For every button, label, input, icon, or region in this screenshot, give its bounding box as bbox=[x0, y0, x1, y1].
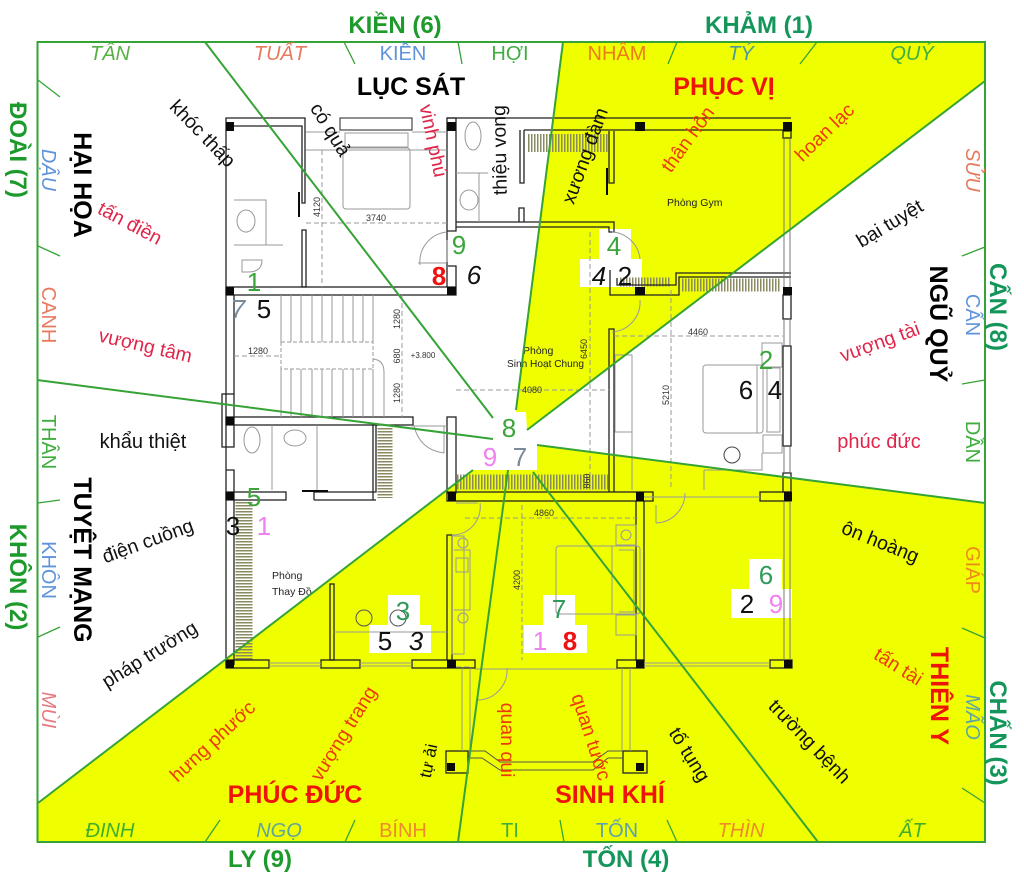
black inauspicious direction labels: trường bệnh bbox=[764, 695, 855, 788]
outer trigram labels: KHẢM (1) bbox=[705, 10, 813, 39]
mountain labels: TÂN bbox=[90, 42, 131, 65]
sector SE stars bbox=[533, 594, 577, 656]
mountain labels: BÍNH bbox=[379, 819, 427, 842]
mountain labels: SỬU bbox=[961, 148, 985, 192]
red auspicious direction labels on white bbox=[94, 102, 923, 453]
sector SW stars bbox=[226, 482, 271, 541]
mountain labels: NGỌ bbox=[256, 820, 302, 842]
black inauspicious direction labels: khóc thấp bbox=[165, 96, 240, 172]
wardrobes bbox=[244, 143, 780, 660]
dimension labels: 1280 bbox=[392, 383, 402, 403]
mountain labels: THÂN bbox=[37, 415, 60, 469]
mountain labels: TI bbox=[501, 820, 519, 842]
mountain labels: KHÔN bbox=[37, 541, 60, 599]
mountain labels: HỢI bbox=[491, 43, 529, 65]
mountain labels: THÌN bbox=[718, 819, 765, 842]
outer trigram labels: ĐOÀI (7) bbox=[4, 102, 32, 198]
mountain labels: DẬU bbox=[37, 149, 60, 192]
red auspicious direction labels on white: vinh phú bbox=[414, 102, 451, 179]
mountain labels: ĐINH bbox=[86, 820, 135, 842]
dimension lines bbox=[234, 150, 783, 667]
black inauspicious direction labels bbox=[98, 96, 928, 788]
center stars: 8 bbox=[502, 413, 516, 443]
mountain labels: CẤN bbox=[961, 294, 984, 336]
outer trigram labels: KIỀN (6) bbox=[348, 11, 442, 39]
red auspicious direction labels on white: tấn điền bbox=[94, 198, 166, 250]
red auspicious direction labels on white: vượng tâm bbox=[96, 325, 194, 368]
dimension labels: 4460 bbox=[688, 327, 708, 337]
mountain labels: DẦN bbox=[961, 421, 984, 463]
star names: LỤC SÁT bbox=[357, 72, 465, 101]
center stars: 7 bbox=[513, 442, 527, 472]
black inauspicious direction labels: xương đàm bbox=[558, 105, 613, 207]
sector S stars: 3 bbox=[409, 626, 424, 656]
mountain labels: TUẤT bbox=[254, 41, 308, 65]
auspicious sector: south and east bbox=[38, 445, 985, 842]
stairs bbox=[281, 295, 384, 417]
sector NE stars: 6 bbox=[739, 375, 753, 405]
black inauspicious direction labels: có quả bbox=[305, 99, 355, 161]
sector W stars: 1 bbox=[247, 267, 261, 297]
dimension labels: 4120 bbox=[312, 197, 322, 217]
sector SW stars: 5 bbox=[247, 482, 261, 512]
sector N stars: 4 bbox=[607, 231, 621, 261]
dimension labels: 6450 bbox=[579, 339, 589, 359]
black inauspicious direction labels: pháp trường bbox=[98, 617, 202, 693]
furniture and fixtures bbox=[234, 118, 790, 770]
mountain labels: MÃO bbox=[961, 694, 985, 740]
dimension labels: 860 bbox=[582, 473, 592, 489]
dimension labels: 4080 bbox=[522, 385, 542, 395]
sector NW stars: 9 bbox=[452, 230, 466, 260]
sector NW stars: 8 bbox=[432, 261, 446, 291]
outer trigram labels: CHẤN (3) bbox=[984, 680, 1012, 786]
dimension labels: 4860 bbox=[534, 508, 554, 518]
auspicious sector: north bbox=[516, 42, 985, 430]
orange-red auspicious direction labels on yellow bbox=[166, 99, 927, 787]
outer trigram labels: CẤN (8) bbox=[984, 263, 1012, 351]
orange-red auspicious direction labels on yellow: hưng phước bbox=[166, 696, 260, 787]
sector SE stars: 1 bbox=[533, 626, 547, 656]
room labels: Sinh Hoạt Chung bbox=[507, 358, 584, 370]
sector N stars: 4 bbox=[592, 261, 606, 291]
sector S stars: 3 bbox=[396, 596, 410, 626]
black inauspicious direction labels: tự ải bbox=[416, 742, 441, 779]
sector SE stars: 7 bbox=[552, 594, 566, 624]
sector E stars: 6 bbox=[759, 560, 773, 590]
mountain labels: MÙI bbox=[37, 692, 60, 729]
dimension labels: +3.800 bbox=[411, 351, 436, 360]
sector NE stars: 4 bbox=[768, 375, 782, 405]
sector NW stars bbox=[432, 230, 482, 291]
black inauspicious direction labels: thiệu vong bbox=[488, 105, 512, 195]
dimension labels: 3740 bbox=[366, 213, 386, 223]
star names: HẠI HỌA bbox=[68, 132, 96, 238]
black inauspicious direction labels: khẩu thiệt bbox=[100, 431, 187, 453]
black inauspicious direction labels: điện cuồng bbox=[99, 515, 197, 568]
orange-red auspicious direction labels on yellow: quan tước bbox=[566, 691, 615, 783]
outer trigram labels: TỐN (4) bbox=[583, 845, 669, 873]
sector SE stars: 8 bbox=[563, 626, 577, 656]
sector E stars: 2 bbox=[740, 589, 754, 619]
mountain labels: ẤT bbox=[898, 818, 927, 842]
star names: PHÚC ĐỨC bbox=[228, 779, 362, 809]
sector S stars bbox=[378, 596, 424, 656]
sector NE stars bbox=[739, 345, 782, 405]
sector SW stars: 3 bbox=[226, 511, 240, 541]
orange-red auspicious direction labels on yellow: tấn tài bbox=[870, 644, 927, 690]
star names bbox=[68, 72, 955, 809]
room labels: Phòng bbox=[523, 345, 554, 357]
star names: TUYỆT MẠNG bbox=[68, 477, 98, 643]
floor plan bbox=[222, 118, 792, 773]
dimension labels: 680 bbox=[392, 348, 402, 364]
star names: THIÊN Y bbox=[925, 647, 955, 745]
mountain labels: QUÝ bbox=[890, 42, 935, 65]
mountain labels: GIÁP bbox=[961, 546, 984, 594]
sector S stars: 5 bbox=[378, 626, 392, 656]
mountain labels: NHÂM bbox=[588, 42, 646, 65]
orange-red auspicious direction labels on yellow: vượng trang bbox=[306, 683, 382, 785]
room labels: Thay Đồ bbox=[272, 586, 312, 598]
star names: PHỤC VỊ bbox=[673, 73, 775, 101]
sector W stars bbox=[231, 267, 271, 324]
sector W stars: 7 bbox=[231, 294, 247, 324]
red auspicious direction labels on white: phúc đức bbox=[837, 431, 921, 453]
sector NW stars: 6 bbox=[467, 260, 482, 290]
mountain labels: KIỀN bbox=[380, 42, 426, 65]
structural columns bbox=[226, 122, 792, 771]
dimension labels: 4200 bbox=[512, 570, 522, 590]
dimension labels bbox=[248, 197, 708, 590]
orange-red auspicious direction labels on yellow: thân hôn bbox=[657, 102, 719, 177]
sector W stars: 5 bbox=[257, 294, 271, 324]
sector NE stars: 2 bbox=[759, 345, 773, 375]
room labels bbox=[272, 197, 723, 598]
mountain labels: TỐN bbox=[596, 818, 638, 842]
center stars: 9 bbox=[483, 442, 497, 472]
sector N stars bbox=[592, 231, 632, 291]
outer trigram labels: LY (9) bbox=[228, 846, 292, 873]
orange-red auspicious direction labels on yellow: hoan lạc bbox=[791, 99, 859, 166]
star names: NGŨ QUỶ bbox=[924, 266, 954, 383]
dimension labels: 1280 bbox=[248, 346, 268, 356]
sector N stars: 2 bbox=[618, 261, 632, 291]
sector E stars: 9 bbox=[769, 589, 783, 619]
black inauspicious direction labels: ôn hoàng bbox=[838, 517, 922, 568]
dimension labels: 1280 bbox=[392, 309, 402, 329]
mountain labels: TÝ bbox=[728, 42, 755, 65]
room labels: Phòng bbox=[272, 570, 303, 582]
star names: SINH KHÍ bbox=[555, 780, 666, 809]
mountain labels: CANH bbox=[37, 287, 59, 343]
sector E stars bbox=[740, 560, 783, 619]
orange-red auspicious direction labels on yellow: quan qui bbox=[496, 703, 518, 777]
black inauspicious direction labels: bại tuyệt bbox=[853, 195, 928, 252]
center stars bbox=[483, 413, 527, 472]
flying star number backgrounds bbox=[369, 229, 792, 653]
black inauspicious direction labels: tố tụng bbox=[664, 724, 714, 786]
red auspicious direction labels on white: vượng tài bbox=[837, 318, 923, 367]
outer trigram labels: KHÔN (2) bbox=[4, 524, 32, 630]
outer and inner walls bbox=[222, 118, 792, 773]
flying star numbers bbox=[226, 230, 783, 656]
room labels: Phòng Gym bbox=[667, 197, 723, 209]
dimension labels: 5210 bbox=[661, 385, 671, 405]
sector SW stars: 1 bbox=[257, 511, 271, 541]
